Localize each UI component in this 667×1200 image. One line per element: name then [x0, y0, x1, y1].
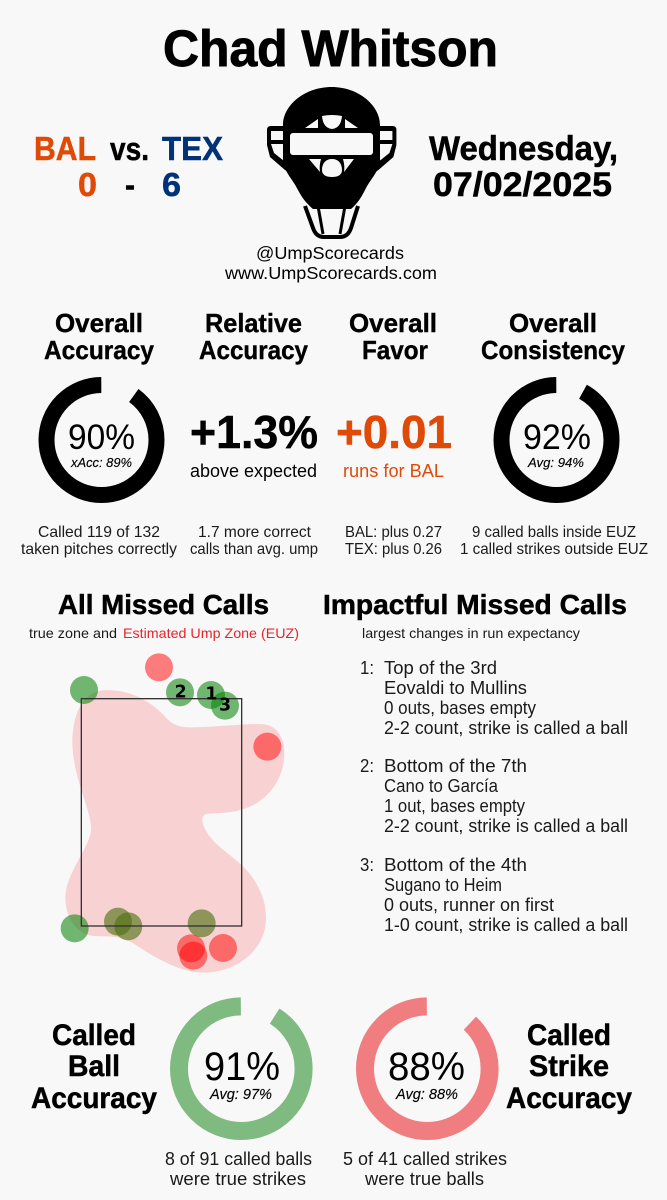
value: 91 percent: 91% [204, 1045, 280, 1089]
caption: called pitches [21, 524, 177, 558]
matchup score [34, 130, 223, 203]
impact rank labels: 2 [175, 682, 187, 702]
missed balls inside the ump zone [104, 908, 216, 940]
list item: call 2: 2-2 count, strike is called a ball [384, 816, 628, 836]
date: Wednesday, [429, 130, 618, 168]
subheading: run expectancy: largest changes in run expectancy [362, 625, 580, 641]
impact rank labels [175, 682, 231, 716]
donut: 92 percent [502, 385, 612, 495]
title: Chad Whitson [163, 20, 498, 77]
impact rank labels: 1 [205, 684, 217, 704]
value: average called ball accuracy: Avg: 97% [209, 1087, 272, 1103]
heading: called strike accuracy: Strike [529, 1050, 609, 1083]
heading: overall favor: Overall [349, 308, 437, 338]
caption: EUZ calls: 1 called strikes outside EUZ [460, 541, 648, 558]
heading: called strike accuracy: Accuracy [506, 1082, 632, 1115]
subheading: zone legend: Estimated Ump Zone (EUZ) [123, 625, 299, 641]
list item: call 2 [360, 756, 628, 836]
panel: relative accuracy [190, 308, 318, 558]
list item: call 1: Eovaldi to Mullins [384, 678, 527, 698]
social handle and website: @UmpScorecards [256, 243, 404, 263]
date: 07/02/2025 [433, 166, 612, 204]
donut: 90 percent [46, 385, 156, 495]
list item: call 1: Top of the 3rd [384, 658, 497, 678]
heading: relative accuracy [199, 308, 309, 365]
matchup score: TEX [162, 130, 223, 167]
heading: overall accuracy: Overall [55, 308, 143, 338]
chart: missed calls zone map [61, 653, 284, 973]
list item: call 2: Cano to García [384, 776, 499, 796]
caption: EUZ calls: 9 called balls inside EUZ [472, 524, 636, 541]
value: 88 percent: 88% [388, 1045, 465, 1089]
list item: call 2: 1 out, bases empty [384, 796, 525, 816]
heading: called ball accuracy: Accuracy [31, 1082, 157, 1115]
missed strikes, red [145, 653, 281, 970]
list item: call 1: 0 outs, bases empty [384, 698, 536, 718]
heading: called ball accuracy: Called [52, 1019, 136, 1052]
list item: call 3: Bottom of the 4th [384, 855, 527, 875]
list item: call 1: 1: [360, 658, 374, 678]
matchup score: - [125, 166, 135, 203]
caption: called strikes: were true balls [364, 1169, 484, 1189]
heading: called strike accuracy [506, 1019, 632, 1115]
panel: overall accuracy [21, 308, 177, 558]
panel: called strike accuracy [343, 1006, 632, 1189]
caption: team favor: BAL: plus 0.27 [345, 524, 442, 541]
donut: 88 percent [365, 1006, 490, 1131]
panel: overall favor [336, 308, 452, 558]
caption: called balls: 8 of 91 called balls [165, 1149, 312, 1169]
list item: call 2: 2: [360, 756, 374, 776]
heading: overall favor: Favor [362, 335, 428, 365]
caption: correct calls: 1.7 more correct [198, 524, 312, 541]
value: 90 percent: 90% [68, 418, 135, 457]
value: plus 0.01: +0.01 [336, 406, 452, 458]
list item: call 3: 3: [360, 855, 374, 875]
caption: called balls [165, 1149, 312, 1189]
label: above expected: above expected [190, 461, 317, 481]
matchup score: BAL [34, 130, 96, 167]
panel: called ball accuracy [31, 1006, 312, 1189]
impact rank labels: 3 [219, 696, 231, 716]
value: expected accuracy: xAcc: 89% [70, 455, 132, 470]
caption: called balls: were true strikes [169, 1169, 306, 1189]
list item: call 1 [360, 658, 628, 738]
heading: overall consistency [481, 308, 625, 365]
heading: called ball accuracy: Ball [68, 1050, 120, 1083]
heading: overall consistency: Overall [509, 308, 597, 338]
list item: call 3 [360, 855, 628, 935]
matchup score: 6 [162, 166, 181, 203]
missed balls, green [61, 676, 239, 942]
true strike zone [81, 699, 242, 926]
heading: impactful missed calls: Impactful Missed Calls [323, 589, 627, 620]
list item: call 2: Bottom of the 7th [384, 756, 527, 776]
matchup score: 0 [78, 166, 97, 203]
social handle and website [224, 243, 437, 283]
caption: called pitches: taken pitches correctly [21, 541, 177, 558]
heading: called ball accuracy [31, 1019, 157, 1115]
heading: overall consistency: Consistency [481, 335, 625, 365]
caption: team favor [345, 524, 442, 558]
caption: correct calls [190, 524, 318, 558]
matchup score: vs. [110, 131, 149, 167]
subheading: zone legend [29, 625, 299, 641]
panel: overall consistency [460, 308, 648, 558]
caption: called strikes [343, 1149, 507, 1189]
date [429, 130, 618, 204]
value: average called strike accuracy: Avg: 88% [395, 1087, 458, 1103]
list item: call 3: Sugano to Heim [384, 875, 502, 895]
caption: called strikes: 5 of 41 called strikes [343, 1149, 507, 1169]
value: 92 percent: 92% [523, 418, 591, 457]
value: plus 1.3 percent: +1.3% [190, 406, 318, 458]
caption: team favor: TEX: plus 0.26 [345, 541, 442, 558]
heading: relative accuracy: Accuracy [199, 335, 309, 365]
icon: umpire mask [267, 87, 396, 237]
caption: called pitches: Called 119 of 132 [38, 524, 160, 541]
estimated ump zone [65, 690, 284, 973]
heading: overall accuracy: Accuracy [44, 335, 155, 365]
social handle and website: www.UmpScorecards.com [224, 263, 437, 283]
caption: correct calls: calls than avg. ump [190, 541, 318, 558]
heading: relative accuracy: Relative [205, 308, 302, 338]
heading: overall favor [349, 308, 437, 365]
subheading: zone legend: true zone and [29, 625, 117, 641]
heading: all missed calls: All Missed Calls [58, 589, 269, 620]
label: runs for BAL: runs for BAL [343, 461, 444, 481]
list item: call 1: 2-2 count, strike is called a ball [384, 718, 628, 738]
donut: 91 percent [179, 1006, 304, 1131]
heading: called strike accuracy: Called [527, 1019, 611, 1052]
list item: call 3: 0 outs, runner on first [384, 895, 554, 915]
list item: call 3: 1-0 count, strike is called a ball [384, 915, 628, 935]
caption: EUZ calls [460, 524, 648, 558]
value: average consistency: Avg: 94% [527, 455, 584, 470]
heading: overall accuracy [44, 308, 155, 365]
